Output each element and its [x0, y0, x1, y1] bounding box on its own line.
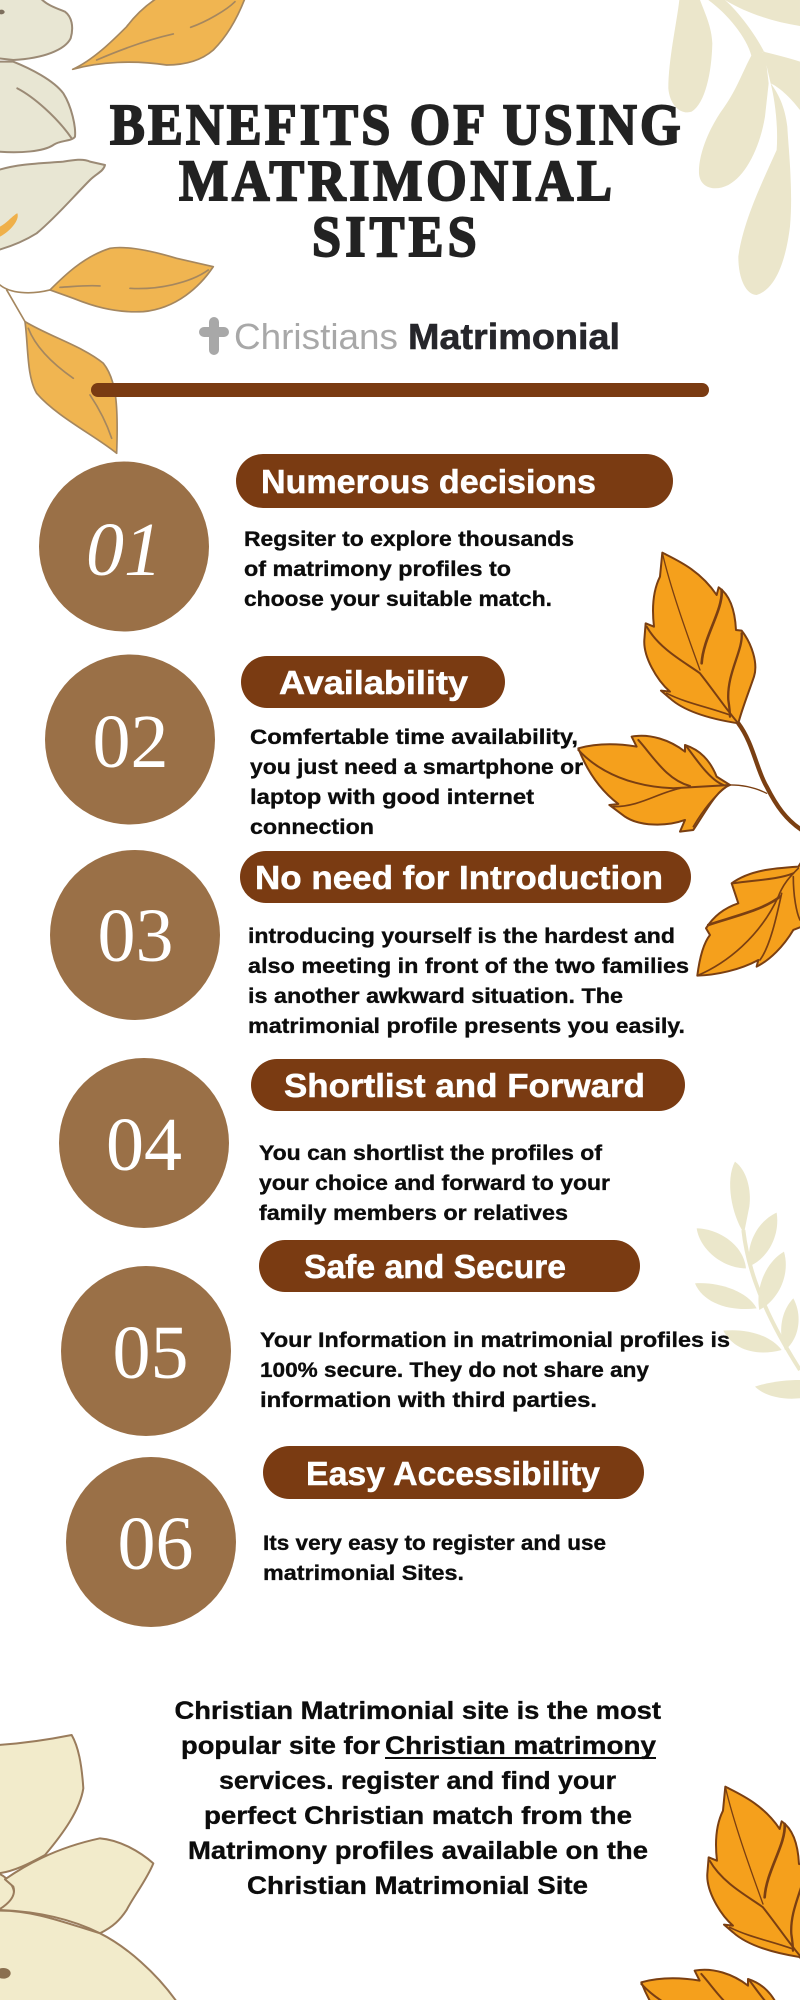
logo: Christians Matrimonial: Matrimonial — [408, 316, 620, 357]
footer paragraph: services. register and find your — [219, 1767, 616, 1795]
footer paragraph — [174, 1697, 662, 1900]
body text — [263, 1531, 606, 1585]
number circle 05 — [61, 1266, 231, 1436]
heading text: Numerous decisions — [261, 463, 596, 500]
number circle 01 — [39, 462, 209, 632]
number 04: 04 — [106, 1103, 182, 1187]
body text: Regsiter to explore thousands — [244, 527, 574, 551]
body text: information with third parties. — [260, 1388, 597, 1412]
body text — [250, 725, 584, 839]
number circle 03 — [50, 850, 220, 1020]
number circle 06 — [66, 1457, 236, 1627]
decoration: top-right beige foliage — [668, 0, 800, 295]
number 06: 06 — [118, 1502, 194, 1586]
heading text: Availability — [279, 664, 469, 701]
body text: your choice and forward to your — [259, 1171, 611, 1195]
body text: matrimonial Sites. — [263, 1561, 464, 1585]
pill heading: Safe and Secure — [259, 1240, 640, 1292]
footer paragraph: perfect Christian match from the — [204, 1802, 632, 1830]
footer paragraph: popular site for — [181, 1732, 380, 1760]
logo: Christians Matrimonial — [204, 316, 620, 357]
body text — [244, 527, 574, 611]
decoration: bottom-left beige leaves — [0, 1735, 177, 2000]
body text: of matrimony profiles to — [244, 557, 511, 581]
title — [110, 92, 681, 269]
body text: family members or relatives — [259, 1201, 568, 1225]
pill heading: Availability — [241, 656, 505, 708]
body text: also meeting in front of the two families — [248, 954, 689, 978]
body text: matrimonial profile presents you easily. — [248, 1014, 685, 1038]
title: BENEFITS OF USING — [110, 92, 681, 157]
icon: lower orange leaf — [697, 862, 800, 976]
pill heading: Numerous decisions — [236, 454, 673, 508]
item 01 — [39, 454, 673, 632]
decoration: top-left leaves — [0, 0, 245, 453]
body text: Its very easy to register and use — [263, 1531, 606, 1555]
number 02: 02 — [92, 700, 168, 784]
body text — [260, 1328, 730, 1412]
body text: is another awkward situation. The — [248, 984, 623, 1008]
body text: connection — [250, 815, 374, 839]
number 01: 01 — [86, 508, 162, 592]
pill heading: Easy Accessibility — [263, 1446, 644, 1499]
item 02 — [45, 654, 584, 839]
body text: introducing yourself is the hardest and — [248, 924, 675, 948]
heading text: No need for Introduction — [255, 859, 663, 896]
number circle 02 — [45, 654, 215, 824]
body text: You can shortlist the profiles of — [259, 1141, 603, 1165]
decoration: small beige branch — [695, 1162, 800, 1399]
footer paragraph: Christian Matrimonial site is the most — [174, 1697, 662, 1725]
body text — [259, 1141, 611, 1225]
footer paragraph: Christian matrimony — [385, 1732, 656, 1760]
body text: 100% secure. They do not share any — [260, 1358, 649, 1382]
body text: Your Information in matrimonial profiles is — [260, 1328, 730, 1352]
title: MATRIMONIAL — [179, 148, 612, 213]
title: SITES — [312, 204, 477, 269]
body text: you just need a smartphone or — [250, 755, 584, 779]
heading text: Shortlist and Forward — [284, 1067, 645, 1104]
footer paragraph: Matrimony profiles available on the — [188, 1837, 648, 1865]
body text: laptop with good internet — [250, 785, 534, 809]
divider bar — [91, 383, 709, 397]
item 04 — [59, 1058, 685, 1228]
number 05: 05 — [112, 1311, 188, 1395]
logo: Christians Matrimonial: Christians — [234, 316, 398, 357]
item 05 — [61, 1240, 730, 1436]
item 06 — [66, 1446, 644, 1627]
decoration: orange leaf twig, right — [578, 553, 800, 976]
heading text: Safe and Secure — [304, 1248, 566, 1285]
body text: Comfertable time availability, — [250, 725, 578, 749]
pill heading: Shortlist and Forward — [251, 1059, 685, 1111]
body text — [248, 924, 689, 1038]
number 03: 03 — [98, 894, 174, 978]
body text: choose your suitable match. — [244, 587, 552, 611]
heading text: Easy Accessibility — [306, 1455, 601, 1492]
icon: cross — [204, 322, 224, 350]
item 03 — [50, 850, 691, 1038]
pill heading: No need for Introduction — [240, 851, 691, 903]
footer paragraph: Christian Matrimonial Site — [247, 1872, 588, 1900]
number circle 04 — [59, 1058, 229, 1228]
decoration: bottom-right orange leaves — [641, 1787, 800, 2000]
